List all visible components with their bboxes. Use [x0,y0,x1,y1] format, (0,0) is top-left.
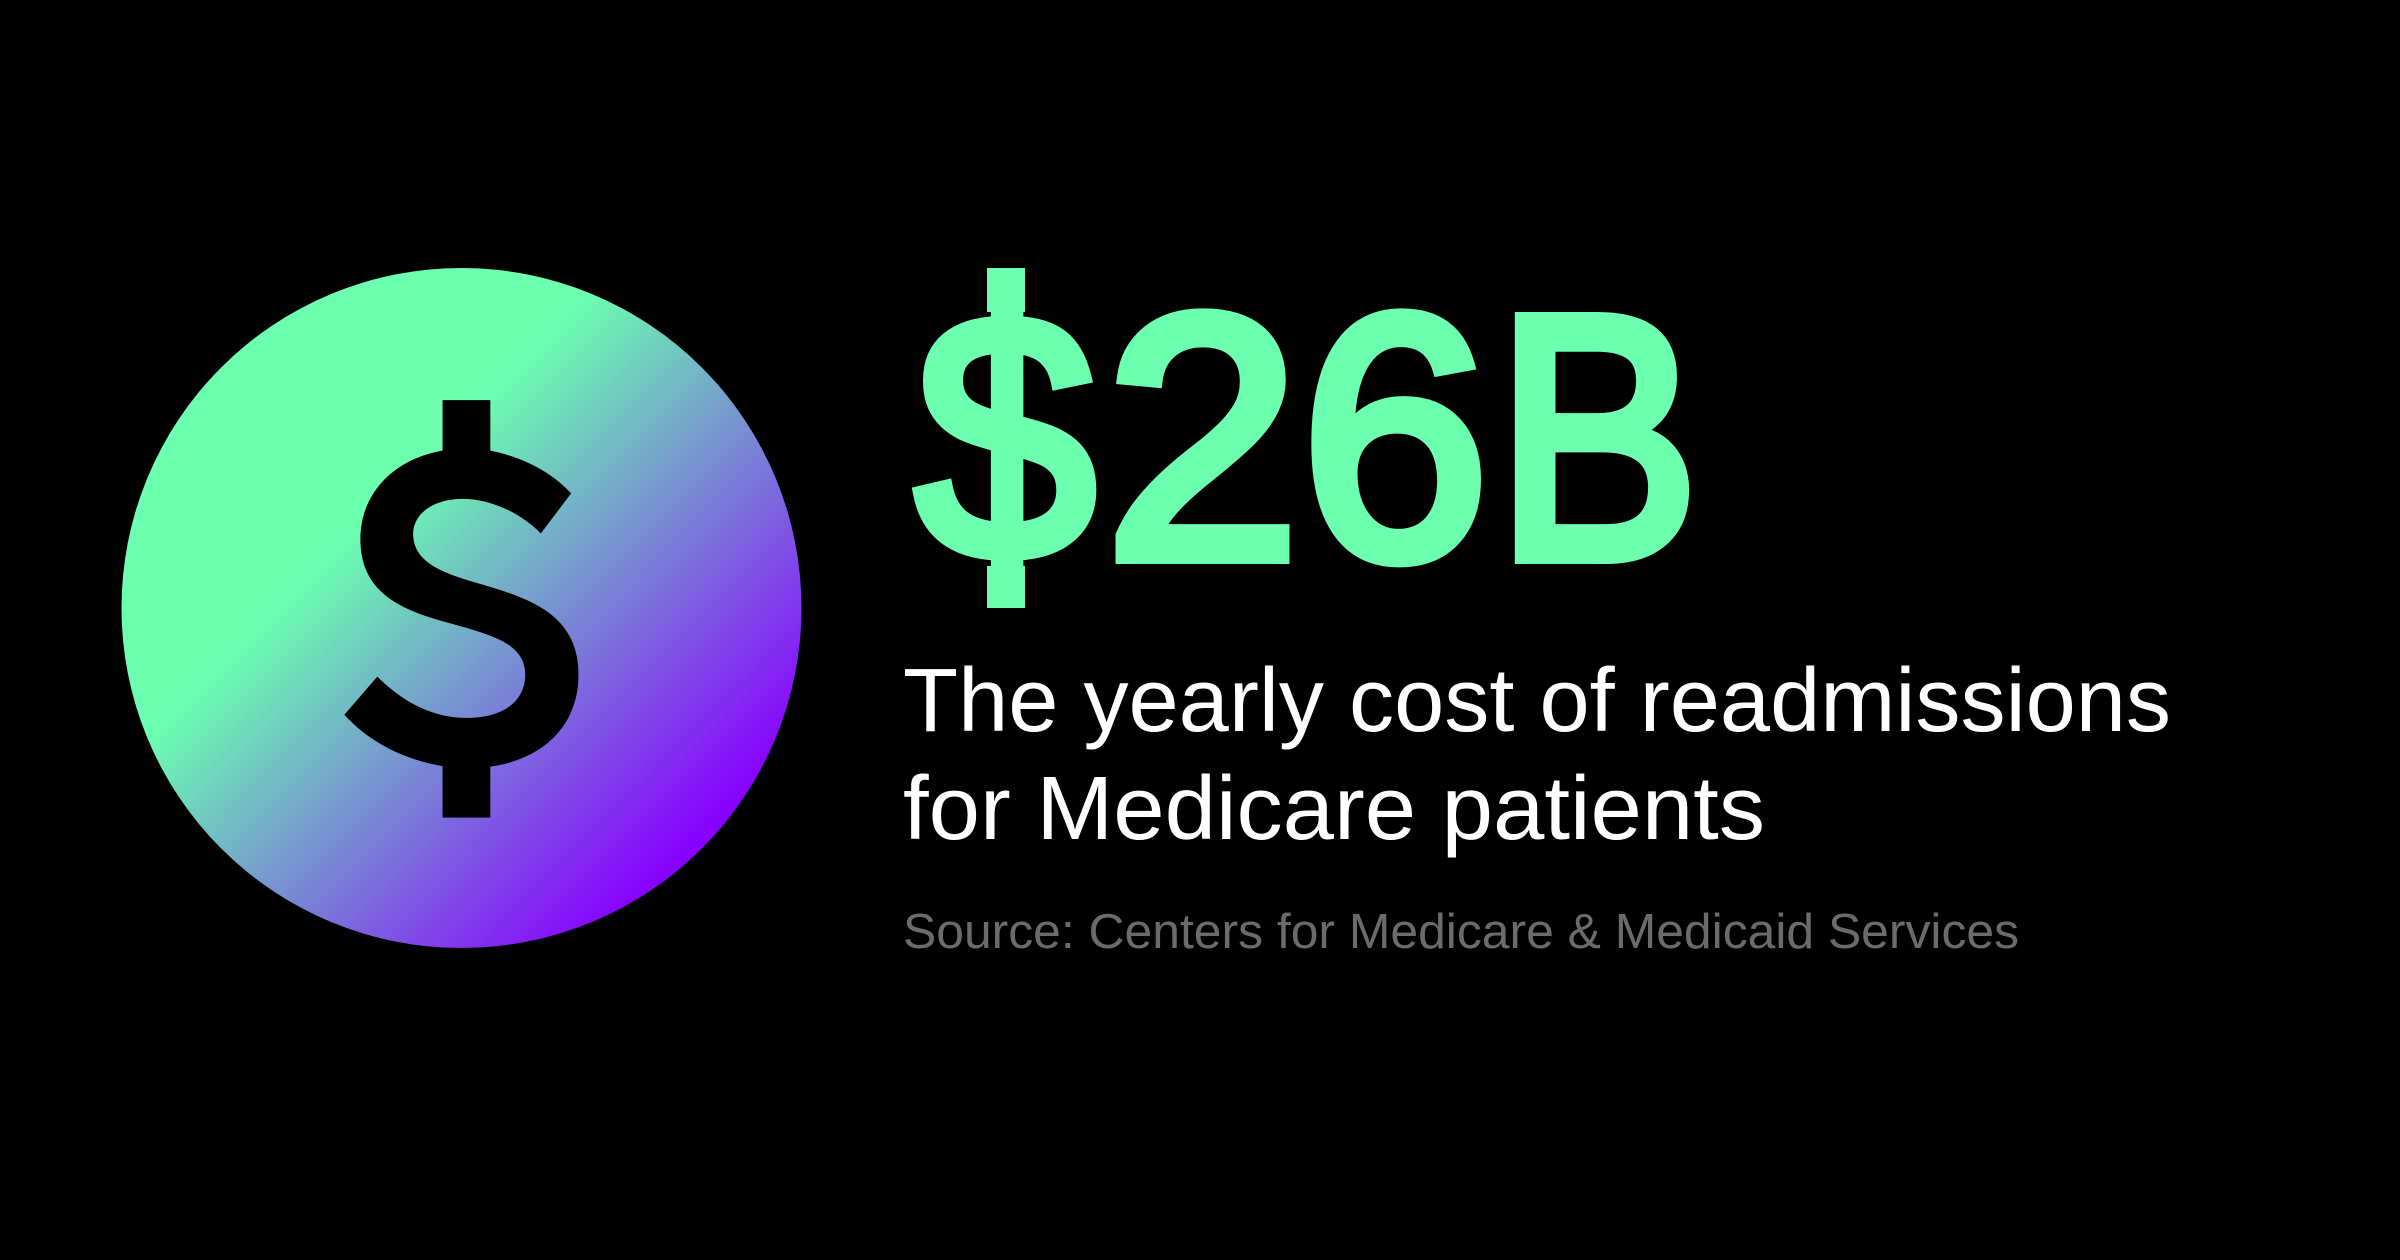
description text: for Medicare patients [903,759,1765,859]
headline figure: 6 [1301,245,1489,631]
headline figure: 2 [1105,245,1300,631]
description text [903,651,2171,859]
headline figure [916,245,1699,631]
source note: Source: Centers for Medicare & Medicaid Services [903,905,2019,959]
headline figure: $ [916,245,1095,631]
description text: The yearly cost of readmissions [903,651,2171,751]
icon: gradient circle with dollar sign [122,268,802,948]
headline figure: B [1496,245,1699,631]
